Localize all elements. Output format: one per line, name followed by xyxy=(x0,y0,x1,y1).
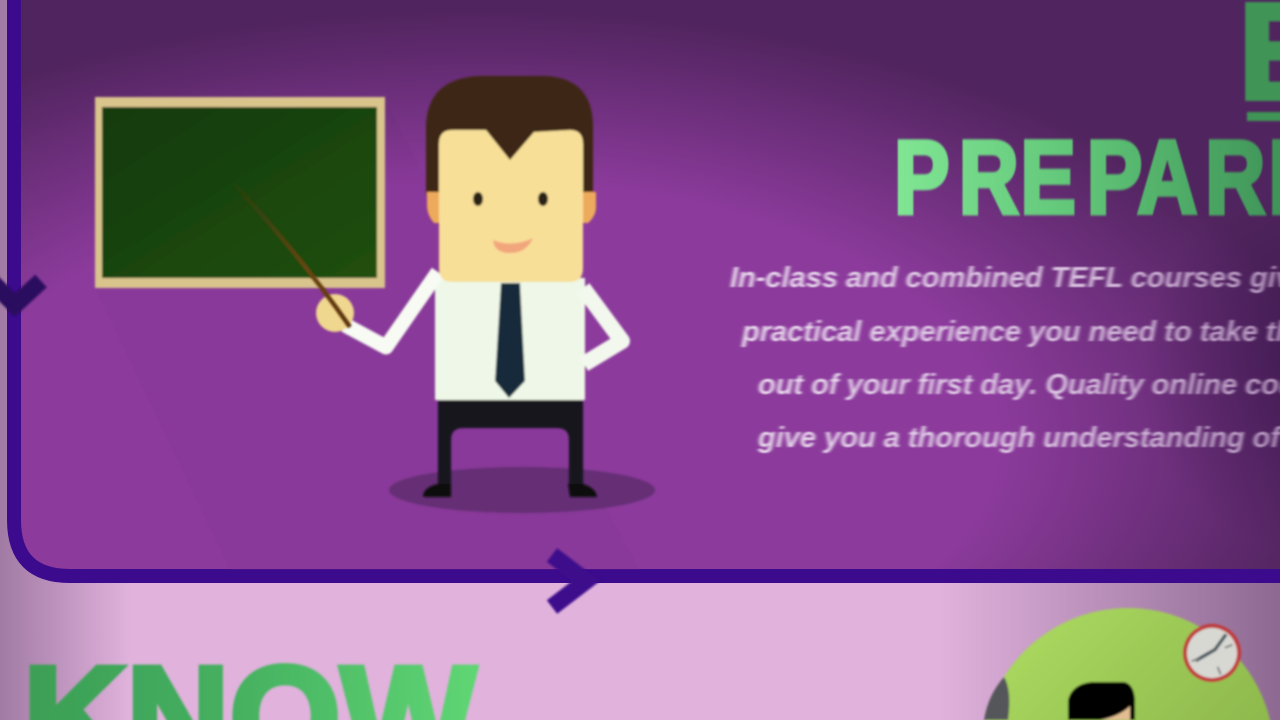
trousers xyxy=(438,398,583,490)
arrow: down on left border xyxy=(0,278,41,305)
arrow: right on bottom border xyxy=(552,555,586,607)
mouth xyxy=(493,238,533,253)
hair xyxy=(426,76,593,195)
figure face xyxy=(1100,706,1130,720)
shoes xyxy=(423,484,597,497)
panel lighting xyxy=(21,0,1280,569)
character: teacher xyxy=(316,76,622,497)
arm: pointing xyxy=(345,272,438,347)
arm: right xyxy=(583,288,622,364)
figure hair xyxy=(1068,682,1135,720)
icon: wall clock xyxy=(1182,622,1242,684)
tie xyxy=(495,283,525,398)
chalkboard long shadow xyxy=(95,100,640,570)
illustration: green circle scene xyxy=(982,608,1274,720)
clock hands xyxy=(1191,634,1231,661)
step letter underline xyxy=(1247,112,1280,121)
panel fill with border xyxy=(14,0,1280,576)
grey object xyxy=(984,677,1009,720)
face xyxy=(439,130,583,282)
shirt xyxy=(435,278,585,400)
character shadow xyxy=(389,467,655,513)
hand xyxy=(316,294,354,332)
icon: chalkboard xyxy=(95,97,385,288)
text block: description: give you a thorough understanding of xyxy=(757,422,1280,454)
text block: description xyxy=(730,262,1280,454)
left border darker section xyxy=(7,0,21,500)
pointer stick xyxy=(235,185,350,327)
green circle xyxy=(982,608,1274,720)
ears xyxy=(427,192,596,223)
eyes xyxy=(473,192,483,206)
